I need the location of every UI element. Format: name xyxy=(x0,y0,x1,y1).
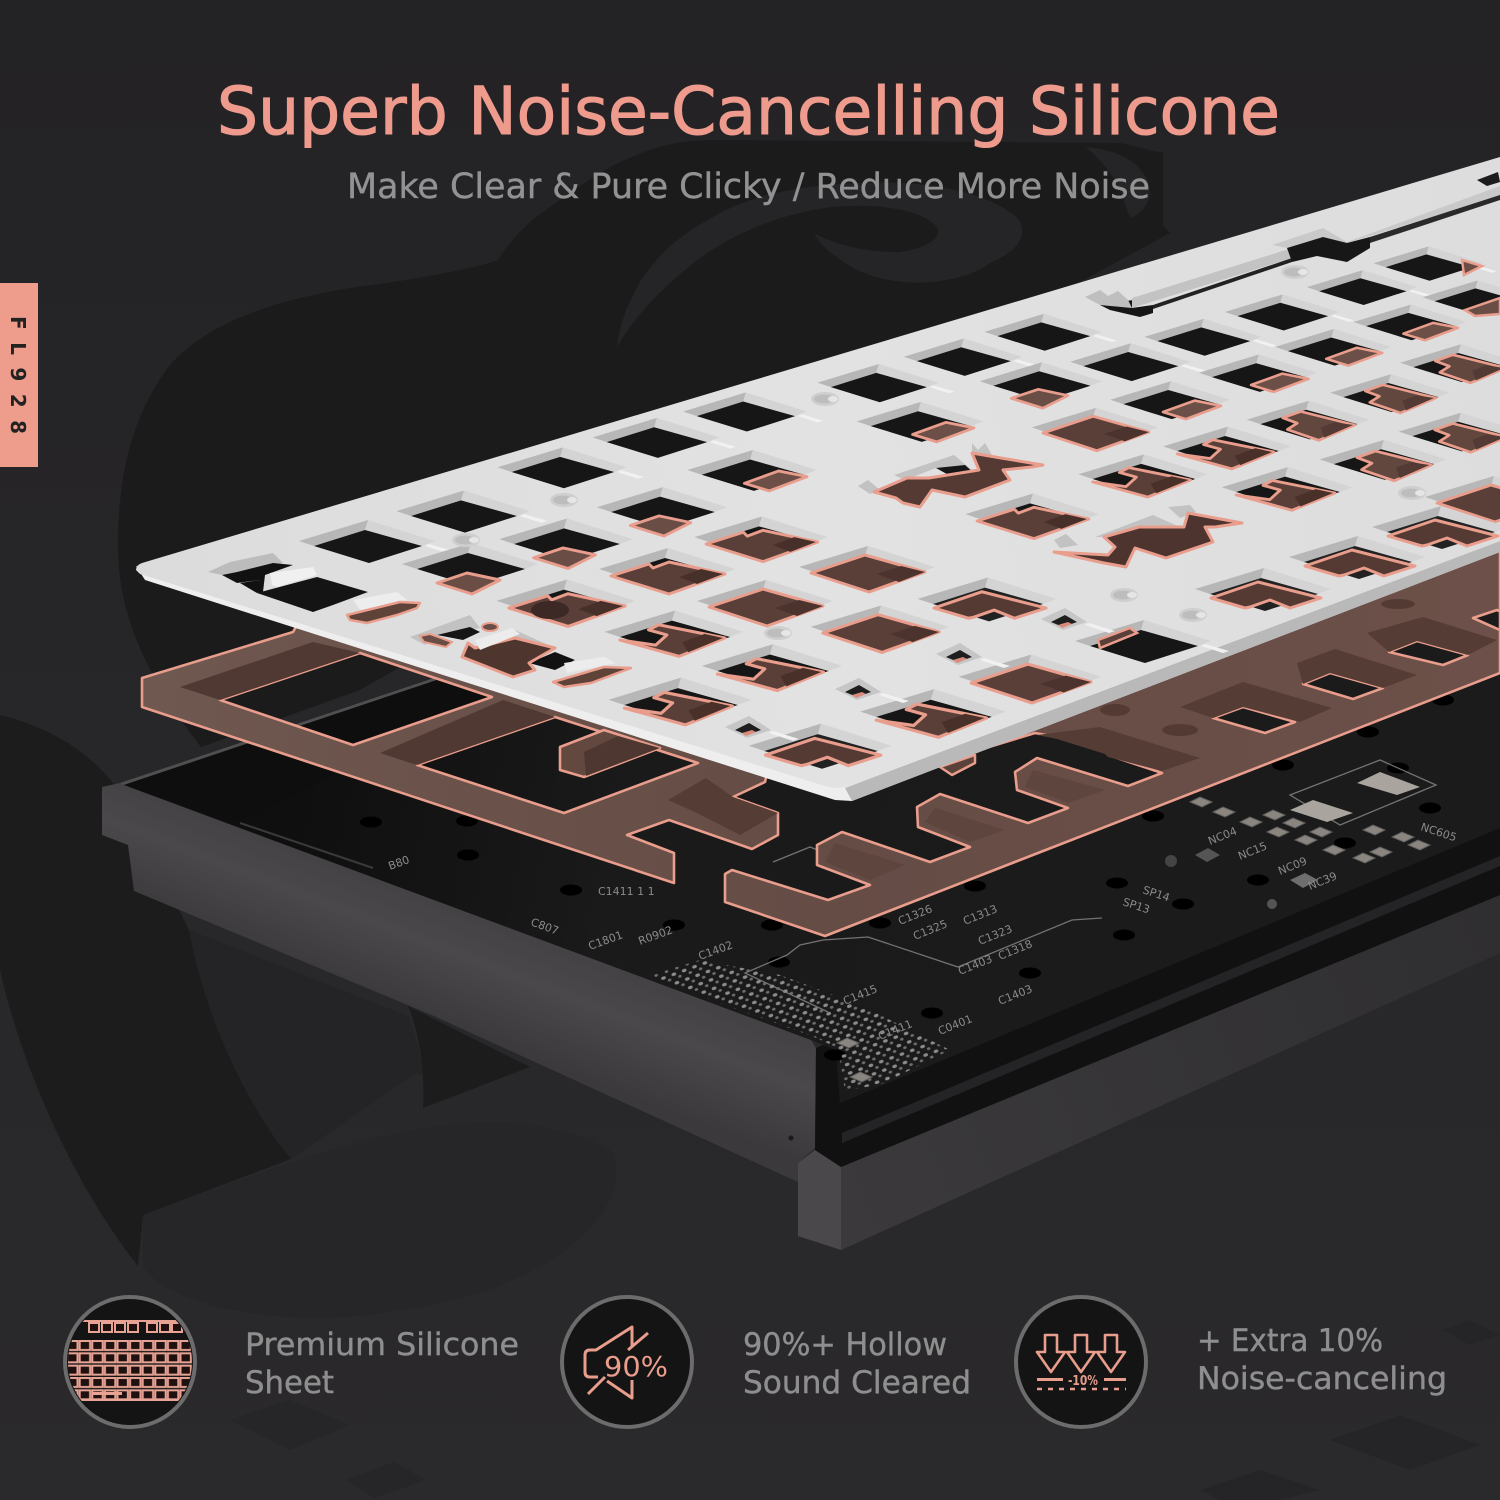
silicone block xyxy=(560,730,660,777)
text: hollow sound cleared: 90%+ Hollow xyxy=(743,1327,947,1363)
subtitle: Make Clear & Pure Clicky / Reduce More Noise xyxy=(347,167,1150,207)
text: premium silicone sheet: Sheet xyxy=(245,1365,334,1401)
board silkscreen labels xyxy=(387,820,1458,1043)
board silkscreen labels: C1403 xyxy=(996,982,1034,1008)
board silkscreen labels: NC605 xyxy=(1419,820,1458,844)
icon: keyboard silicone sheet xyxy=(65,1297,195,1427)
plate key holes: top rows xyxy=(299,246,1500,594)
board silkscreen labels: R0902 xyxy=(637,923,675,948)
board silkscreen labels: B80 xyxy=(387,853,411,873)
plate tiny cutouts xyxy=(725,608,1115,741)
board silkscreen labels: NC15 xyxy=(1236,840,1269,863)
board silkscreen labels: SP14 xyxy=(1141,883,1171,904)
board silkscreen labels: C1411 1 1 xyxy=(598,885,655,898)
icon: arrows -10%: -10% xyxy=(1068,1374,1098,1389)
plate key holes: half silicone xyxy=(687,305,1466,491)
board silkscreen labels: C1323 xyxy=(976,922,1014,948)
case left wall xyxy=(102,783,816,1182)
board silkscreen labels: C1325 xyxy=(911,917,949,943)
board silkscreen labels: C1415 xyxy=(841,982,879,1008)
stabilizer left upper xyxy=(208,553,420,623)
plate long slot xyxy=(1085,172,1500,317)
board silkscreen labels: NC04 xyxy=(1206,825,1239,848)
feature 2: hollow sound cleared xyxy=(562,1297,971,1427)
plate key holes: lower notch silicone xyxy=(749,506,1500,769)
stabilizer right lower xyxy=(1054,505,1242,567)
board silkscreen labels: C807 xyxy=(529,916,560,938)
plate screw recesses xyxy=(452,265,1426,640)
board silkscreen labels: C1402 xyxy=(697,938,735,963)
icon: arrows -10% xyxy=(1016,1297,1146,1427)
case right wall xyxy=(841,895,1500,1250)
feature 1: premium silicone sheet xyxy=(65,1297,519,1427)
circuit board xyxy=(124,350,1500,1103)
plate side faces xyxy=(136,540,1500,801)
screw xyxy=(788,1136,794,1140)
silicone tooth shading xyxy=(825,843,905,880)
silicone dents xyxy=(1162,724,1198,736)
board silkscreen labels: SP13 xyxy=(1121,895,1151,916)
board silkscreen labels: C1403 xyxy=(956,952,994,978)
top plate xyxy=(136,157,1500,801)
board silkscreen labels: C1411 xyxy=(876,1017,914,1043)
plate top face xyxy=(136,157,1500,788)
board silkscreen labels: C1318 xyxy=(996,937,1034,963)
case corner xyxy=(798,1150,841,1250)
case channel xyxy=(815,760,1500,1167)
stabilizer right upper xyxy=(858,443,1043,507)
keyboard case xyxy=(102,677,1500,1250)
board solder speckle xyxy=(650,960,950,1090)
board silkscreen labels: C1313 xyxy=(961,902,999,928)
side tab: model name xyxy=(0,283,38,467)
silicone recessed strips xyxy=(180,617,1497,835)
board silkscreen labels: C0401 xyxy=(936,1012,974,1038)
board mounting holes xyxy=(360,694,1454,1060)
text: extra noise-canceling: Noise-canceling xyxy=(1197,1361,1447,1397)
case rim xyxy=(120,677,437,785)
text: premium silicone sheet: Premium Silicone xyxy=(245,1327,519,1363)
silicone sheet xyxy=(142,500,1500,936)
board silkscreen labels: NC09 xyxy=(1276,855,1309,878)
plate key holes: full silicone xyxy=(497,408,1500,703)
board silkscreen labels: C1801 xyxy=(587,928,625,953)
silicone tab under plate xyxy=(940,755,975,775)
icon: muted speaker 90%: 90% xyxy=(604,1350,668,1383)
board silkscreen labels: NC39 xyxy=(1306,870,1339,893)
feature 3: extra noise-canceling xyxy=(1016,1297,1447,1427)
side tab: model name: FL928 xyxy=(6,316,30,434)
board silkscreen labels: C1326 xyxy=(896,902,934,928)
stabilizer left lower xyxy=(410,615,631,687)
text: extra noise-canceling: + Extra 10% xyxy=(1197,1323,1383,1359)
icon: muted speaker 90% xyxy=(562,1297,692,1427)
plate key holes: hook silicone xyxy=(605,427,1352,737)
board components xyxy=(837,772,1430,1082)
text: hollow sound cleared: Sound Cleared xyxy=(743,1365,971,1401)
title: Superb Noise-Cancelling Silicone xyxy=(217,73,1280,150)
board traces xyxy=(745,760,1436,1012)
plate key holes: L silicone xyxy=(1247,344,1500,481)
